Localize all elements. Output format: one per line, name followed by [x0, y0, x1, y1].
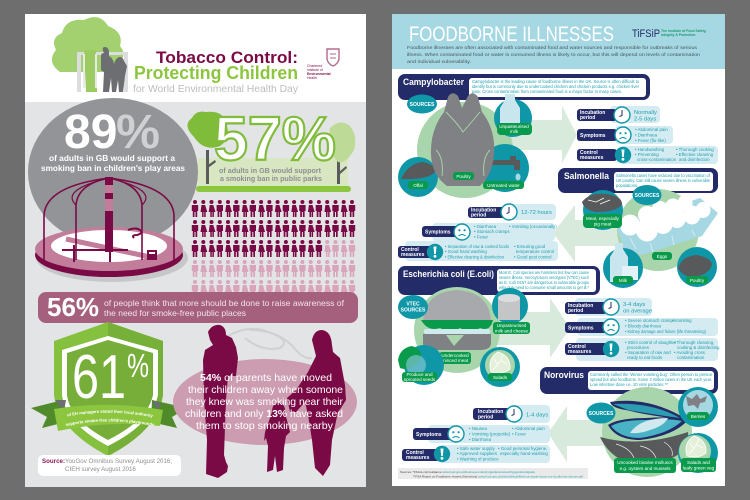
sources footnote: **FSA Report on Foodborne viruses (Norovirus) www.food.gov.uk/sites/default/files/our-report-issue-one-foodborne-viruses.pdf — [413, 474, 583, 478]
logo: TiFSiP: TiFSiP — [632, 28, 660, 40]
logo: Chartered Institute of Environmental Health: Institute of — [307, 68, 323, 72]
source note: CIEH survey August 2016 — [65, 466, 136, 473]
badge: sources: SOURCES — [635, 193, 660, 199]
section: Campylobacter — [398, 74, 718, 198]
source: water — [481, 144, 529, 192]
source circle: green — [417, 102, 513, 198]
row: symptoms: • Abdominal pain — [635, 127, 668, 132]
logo: Chartered Institute of Environmental Health: Health — [307, 76, 317, 80]
row: control measures: Control — [580, 150, 598, 156]
row: control measures: cooking & disinfecting — [677, 345, 720, 350]
row: incubation: period — [471, 212, 486, 218]
stat circle: 89 percent: % — [116, 106, 160, 159]
poster background — [392, 14, 725, 486]
source: poultry — [677, 247, 717, 287]
logo: Chartered Institute of Environmental Health: Environmental — [307, 72, 331, 76]
source: produce and sprouted seeds — [398, 345, 444, 385]
row: symptoms: • Fever — [512, 432, 527, 436]
stat circle: 89 percent: of adults in GB would support a — [49, 153, 175, 163]
badge: sources — [586, 402, 616, 424]
row: incubation: 2-5 days — [634, 116, 656, 122]
header band — [392, 14, 725, 69]
row: control measures: procedures — [627, 345, 650, 350]
row: control measures: • Separation of raw and — [625, 350, 671, 355]
row: symptoms: Symptoms — [416, 432, 442, 438]
row: control measures: • Avoiding cross — [674, 350, 706, 355]
row: control measures: • Ensuring good — [514, 244, 546, 249]
logo: Chartered Institute of Environmental Health: Chartered — [307, 64, 322, 68]
silhouette: child — [264, 402, 290, 472]
row: symptoms: • Diarrhoea — [635, 132, 658, 138]
source: eggs in tray: Eggs — [657, 254, 668, 259]
icon: tree with swing and children — [52, 17, 128, 92]
row: incubation: period — [568, 308, 583, 314]
shield: 61 percent: % — [127, 347, 149, 384]
heading box: Escherichia coli (E.coli) — [403, 269, 494, 280]
row: control measures: measures — [406, 455, 430, 461]
row: control measures: • Effective cleaning — [676, 152, 714, 157]
row: symptoms: • Fever (flu-like) — [635, 138, 666, 143]
heading box: who only need to consume small amounts to get ill.* — [499, 285, 589, 290]
source: milk — [494, 94, 532, 137]
row: control measures — [398, 241, 558, 261]
logo: TiFSiP: The Institute of Food Safety, — [661, 29, 706, 33]
row: symptoms: • Kidney damage and failure (life threatening) — [625, 329, 706, 334]
text: parents statistic — [185, 373, 344, 432]
source: poultry: Poultry — [690, 278, 705, 283]
source: produce and sprouted seeds: sprouted seeds — [404, 377, 436, 382]
row: incubation — [473, 405, 550, 423]
panel: foodborne illnesses poster — [392, 14, 725, 486]
heading box: spread but also foodborne. Some 3 million cases in the UK each year. — [590, 377, 712, 382]
source: berries — [678, 387, 718, 427]
banner: 56 percent: 56% — [47, 292, 99, 322]
row: control measures: • Washing of produce — [457, 456, 499, 462]
row: control measures: especially hand-washing — [500, 451, 548, 456]
ribbon: of EH managers stated their local authority — [67, 410, 153, 418]
intro paragraph: and individual vulnerability. — [407, 59, 471, 65]
heading box: Low infective dose i.e. 10 viral particles ** — [590, 382, 668, 387]
banner: 56 percent: of people think that more should be done to raise awareness of — [104, 298, 345, 308]
section: Escherichia coli — [398, 266, 720, 387]
panel: tobacco control poster — [25, 14, 366, 487]
stat: 57 percent with trees: 57% — [214, 105, 336, 174]
row: control measures: contamination — [677, 355, 705, 360]
source: milk and cheese: milk and cheese — [495, 328, 529, 334]
source: meat: Meat, especially — [586, 216, 620, 221]
row: control measures: and disinfection — [679, 157, 710, 162]
row: control measures: • Separation of raw & cooked foods — [445, 244, 510, 249]
row: control measures: • Good pest control — [514, 254, 551, 260]
row: control measures: • Preventing — [635, 152, 659, 157]
source: milk and cheese — [492, 288, 530, 334]
source: offal — [398, 157, 438, 197]
source note: YouGov Omnibus Survey August 2016; — [65, 458, 172, 465]
poster body background — [25, 102, 366, 487]
row: control measures: temperature control — [516, 249, 554, 254]
smoke — [228, 329, 312, 358]
heading box — [540, 367, 718, 394]
source: water: Untreated water — [487, 183, 520, 188]
heading box — [398, 266, 600, 295]
row: incubation: Incubation — [478, 409, 503, 415]
source: mussel: Uncooked bivalve molluscs — [617, 460, 673, 465]
source: produce and sprouted seeds: Produce and — [406, 372, 433, 377]
row: symptoms — [565, 318, 718, 336]
row: control measures: ready to eat foods — [627, 355, 663, 360]
badge: sources — [632, 185, 662, 205]
title: Foodborne Illnesses: FOODBORNE ILLNESSES — [409, 23, 614, 46]
heading box: Salmonella — [564, 171, 610, 182]
silhouette: man smoking — [203, 325, 238, 478]
heading box — [558, 168, 718, 193]
stat: 57 percent with trees: of adults in GB would support — [219, 166, 322, 175]
title: Tobacco Control: Tobacco Control: — [156, 48, 298, 67]
subtitle: for World Environmental Health Day — [133, 84, 298, 95]
banner: 56 percent — [38, 292, 358, 323]
row: symptoms: • Severe stomach cramps — [625, 318, 676, 323]
row: control measures: • Safe water supply — [457, 446, 495, 451]
row: incubation: period — [478, 414, 493, 420]
source circle: green — [414, 287, 500, 373]
text: parents statistic: them to stop smoking nearby — [196, 421, 334, 432]
source: salads and leafy green veg — [678, 433, 718, 473]
ribbon — [31, 400, 177, 431]
stat circle: 89 percent: 89 — [64, 106, 117, 159]
source: burger — [421, 290, 493, 364]
heading box — [398, 74, 650, 100]
row: control measures — [577, 146, 718, 164]
text: parents statistic: their children away when somone — [188, 385, 343, 396]
source: meat: pig meat — [594, 222, 612, 226]
row: symptoms: • Nausea — [469, 426, 487, 431]
source: mussel: e.g. oysters and mussels — [620, 466, 671, 471]
badge: sources: SOURCES — [410, 102, 435, 108]
pictogram: 56 of 100 people — [192, 200, 355, 297]
source: eggs in tray — [616, 195, 718, 260]
row: symptoms: • Bloody diarrhoea — [625, 324, 662, 328]
source: meat — [582, 190, 623, 230]
row: symptoms — [413, 425, 550, 443]
source circle: green — [602, 387, 692, 477]
row: control measures — [402, 445, 550, 463]
banner: 56 percent: the need for smoke-free public places — [104, 308, 246, 318]
shield: 61 percent — [31, 322, 177, 455]
row: symptoms: • Fever — [474, 234, 489, 240]
source note — [38, 455, 181, 476]
row: control measures: • Approved suppliers — [457, 451, 498, 456]
row: control measures: measures — [401, 252, 425, 258]
arrow left — [553, 205, 625, 262]
row: control measures: measures — [568, 349, 592, 355]
heading box: populations. — [616, 183, 638, 188]
source: chicken: Poultry — [456, 174, 471, 179]
row: incubation: Incubation — [580, 110, 605, 116]
row: control measures: • Strict control of slaughter — [625, 340, 677, 345]
row: symptoms — [577, 126, 673, 144]
source note: Source: — [42, 458, 65, 465]
row: symptoms: • Vomiting (occasionally) — [509, 224, 557, 229]
row: control measures: • Thorough cooking — [676, 147, 714, 152]
heading box: severe illness. Verocytotoxin serotypes (VTEC) such — [499, 275, 590, 280]
row: control measures: • Handwashing — [635, 147, 665, 152]
source: salads and leafy green veg: leafy green veg — [683, 466, 715, 470]
row: symptoms: • Abdominal pain — [512, 426, 545, 431]
row: control measures: Control — [406, 450, 424, 456]
row: control measures — [565, 338, 720, 361]
row: control measures: measures — [580, 155, 604, 161]
section: Salmonella — [398, 168, 718, 288]
row: incubation: Incubation — [471, 208, 496, 214]
row: incubation — [468, 204, 556, 220]
source: mussel — [600, 401, 688, 473]
heading box: pate. Cross contamination from contaminated food is a major factor in many cases. — [472, 89, 622, 94]
badge: sources — [407, 94, 437, 114]
intro paragraph — [407, 45, 700, 65]
title: Protecting Children: Protecting Children — [134, 63, 298, 83]
logo: TiFSiP: Integrity & Protection — [661, 33, 695, 37]
row: symptoms: Symptoms — [425, 230, 451, 236]
badge: VTEC sources — [398, 295, 428, 319]
row: symptoms: Symptoms — [580, 133, 606, 139]
stat circle: 89 percent — [28, 98, 198, 246]
source: milk: milk — [510, 129, 519, 134]
row: symptoms: • Vomiting (projectile) — [469, 432, 511, 436]
source: burger: minced meat — [442, 358, 469, 363]
source: salads: Salads — [493, 375, 508, 380]
badge: sources: SOURCES — [589, 411, 614, 417]
silhouette: woman — [287, 330, 346, 476]
ellipse: pink callout — [173, 359, 357, 445]
text: parents statistic: children and only 13% have asked — [185, 409, 343, 420]
logo: TiFSiP — [632, 28, 706, 40]
source: burger: Undercooked — [441, 353, 469, 358]
row: symptoms — [422, 223, 557, 241]
arrow right — [490, 298, 570, 358]
row: symptoms: • Diarrhoea — [474, 224, 497, 229]
heading box: Campylobacter is the leading cause of foodborne illness in the UK. Source is often difficult to — [472, 79, 640, 84]
row: symptoms: • Diarrhoea — [469, 437, 492, 442]
row: incubation: 12-72 hours — [521, 210, 552, 216]
stat: 57 percent with trees: a smoking ban in public parks — [220, 174, 322, 183]
heading box: Norovirus — [544, 370, 584, 381]
row: symptoms: • Stomach cramps — [474, 229, 511, 234]
sources footnote — [398, 468, 588, 479]
heading box: Campylobacter — [403, 77, 464, 88]
row: incubation: Incubation — [568, 303, 593, 309]
poster header background — [25, 14, 366, 102]
heading box: as E. Coli O157 are dangerous to vulnerable groups — [499, 280, 589, 285]
row: control measures: • Effective cleaning & disinfection — [445, 254, 504, 260]
logo: Chartered Institute of Environmental Health — [307, 49, 339, 80]
row: incubation: on average — [623, 308, 652, 314]
heading box: identify but is commonly due to undercooked chicken and chicken products e.g. chicken liver — [472, 84, 640, 89]
row: symptoms: Symptoms — [568, 326, 594, 332]
ribbon: supports smoke-free children's playgrounds — [66, 418, 154, 426]
badge: VTEC sources: VTEC — [406, 302, 420, 308]
row: incubation — [565, 298, 652, 316]
source: chicken — [431, 93, 494, 186]
row: incubation — [577, 106, 660, 123]
stat circle: 89 percent: smoking ban in children's play areas — [41, 163, 185, 173]
row: control measures: • Good personal hygiene, — [498, 446, 547, 451]
source circle: green — [617, 189, 699, 271]
intro paragraph: illness. When contaminated food or water is consumed illness is likely to occur, but this will depend on levels of contamination — [407, 52, 700, 58]
row: symptoms: • Vomiting — [672, 318, 692, 323]
row: incubation: 1-4 days — [526, 412, 548, 418]
sources footnote: Sources: *FSA E.coli Guidance www.food.gov.uk/business-industry/guidancenotes/hygguid/ecoliguide — [400, 470, 535, 474]
source: milk and cheese: Unpasteurised — [497, 323, 527, 328]
heading box: Commonly called the 'Winter vomiting bug'. Often person to person — [590, 372, 713, 377]
heading box: Salmonella cases have reduced due to vaccination of — [616, 173, 711, 178]
badge: VTEC sources: SOURCES — [401, 308, 426, 314]
source: milk: Milk — [619, 278, 628, 283]
row: control measures: Control — [568, 344, 586, 350]
arrow right — [490, 106, 577, 163]
heading box: UK poultry. Can still cause severe illness in vulnerable — [616, 178, 711, 183]
row: control measures: cross-contamination — [637, 157, 677, 162]
source: milk — [603, 243, 643, 288]
shield: 61 percent: 61 — [72, 343, 126, 412]
text: parents statistic: they knew was smoking near their — [186, 397, 344, 408]
row: control measures: Control — [401, 247, 419, 253]
source: milk: Unpasteurised — [499, 124, 529, 129]
row: incubation: period — [580, 115, 595, 121]
source: berries: Berries — [691, 414, 706, 419]
source: salads — [480, 347, 520, 387]
row: incubation: 3-4 days — [623, 302, 645, 308]
row: incubation: Normally — [634, 110, 657, 116]
heading box: Most E. Coli species are harmless but few can cause — [499, 270, 590, 275]
section: Norovirus — [402, 367, 718, 477]
icon: roundabout with no smoking sign — [35, 177, 188, 282]
row: control measures: • Thorough cleaning, — [674, 340, 714, 345]
intro paragraph: Foodborne illnesses are often associated with contaminated food and water sources and responsible for outbreaks of serious — [407, 45, 698, 51]
stat: 57 percent with trees — [187, 105, 355, 192]
source: offal: Offal — [413, 183, 423, 188]
row: control measures: • Good hand washing — [445, 249, 487, 254]
arrow left — [548, 406, 610, 462]
source: salads and leafy green veg: Salads and — [687, 460, 710, 465]
text: parents statistic: 54% of parents have moved — [200, 373, 332, 384]
